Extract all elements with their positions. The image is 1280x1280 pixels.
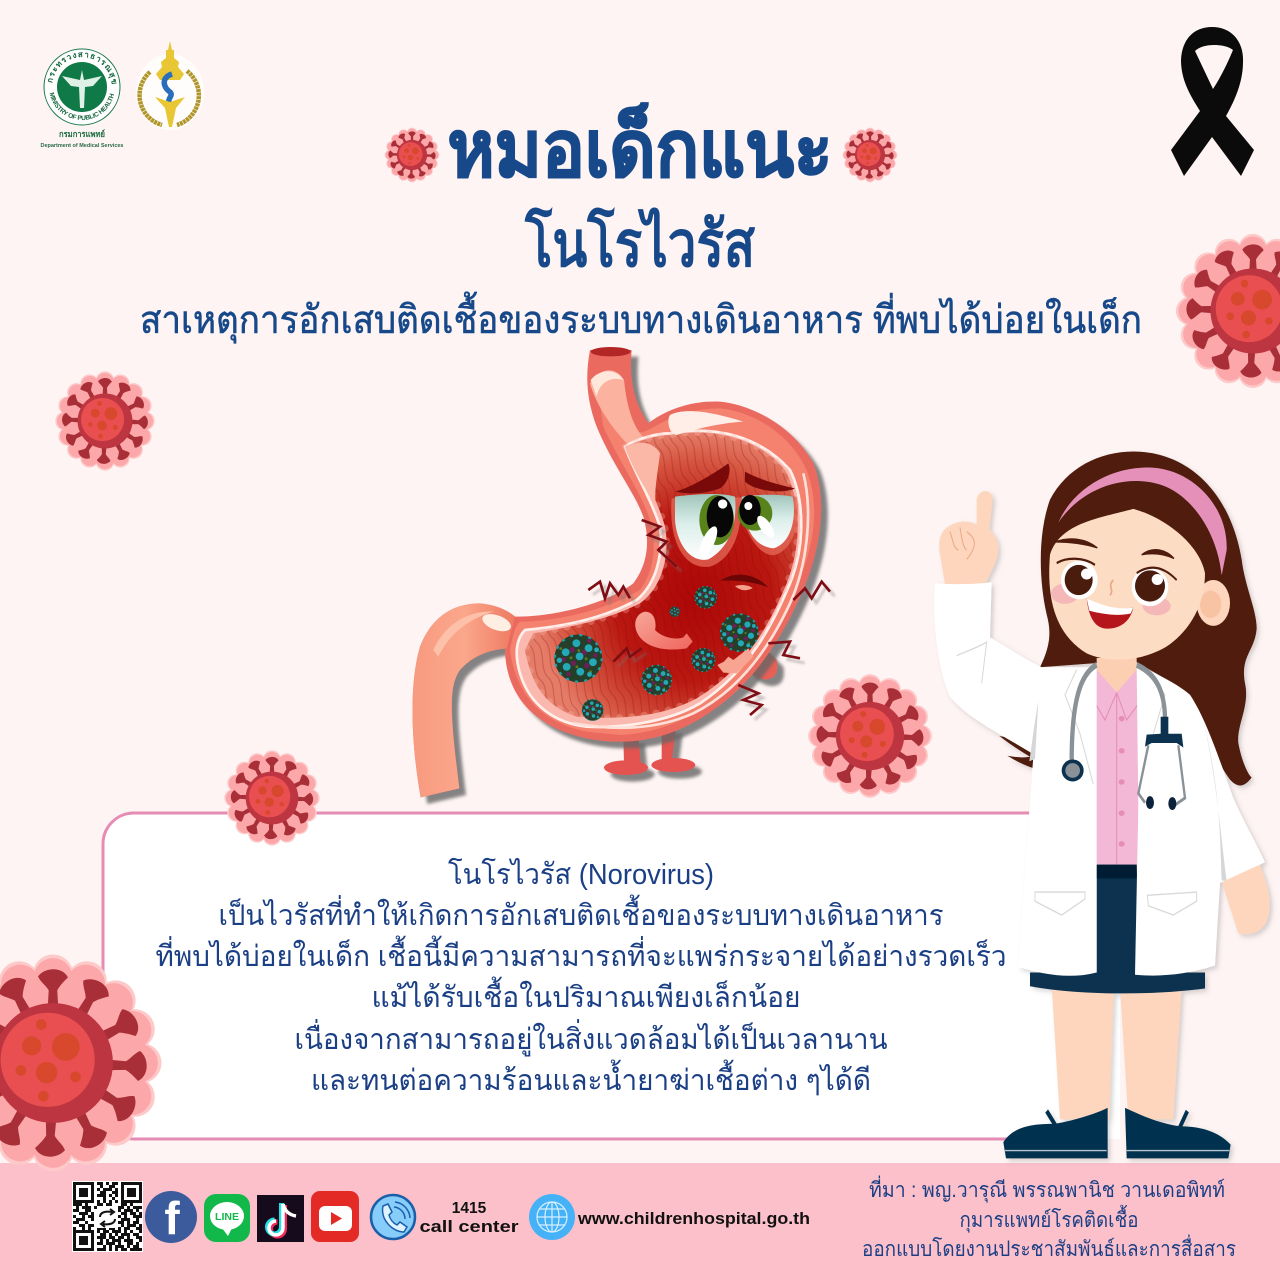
virus: near stomach right [808,674,932,798]
line 6: และทนต่อความร้อนและน้ำยาฆ่าเชื้อต่าง ๆได้ดี [311,1059,871,1097]
subtitle: description: สาเหตุการอักเสบติดเชื้อของระบบทางเดินอาหาร ที่พบได้บ่อยในเด็ก [140,291,1142,344]
call center label: call center [420,1218,519,1236]
logo: Ministry of Public Health: MINISTRY OF PUBLIC HEALTH [50,92,114,120]
stomach legs and outer arm [604,647,777,775]
illustration: doctor pointing up [934,451,1270,1158]
doctor raised hand [939,491,998,585]
icon: LINE: LINE [215,1211,239,1223]
icon: TikTok [257,1195,304,1242]
logo: Ministry of Public Health [40,48,124,149]
virus: title left [385,128,439,182]
logo: Ministry of Public Health: กรมการแพทย์ [59,129,105,139]
virus: top right large [1176,234,1280,388]
doctor hair back [999,451,1257,786]
virus: title right [843,128,897,182]
footer band [0,1163,1280,1280]
stomach face [671,463,798,590]
pain zigzags [588,520,830,715]
virus: above panel [224,750,320,846]
QR code [72,1181,143,1252]
doctor face [1049,468,1230,660]
icon: Facebook: f [164,1192,180,1244]
call center label: 1415 [452,1200,487,1217]
illustration: sad stomach with viruses [413,347,830,797]
line 1: โนโรไวรัส (Norovirus) [448,857,714,891]
website: www.childrenhospital.go.th [577,1209,810,1228]
title: หมอเด็กแนะ [448,103,832,193]
icon: YouTube [311,1191,359,1242]
icon: globe [529,1194,575,1240]
doctor shoes [1003,1108,1231,1158]
line 3: ที่พบได้บ่อยในเด็ก เชื้อนี้มีความสามารถที่จะแพร่กระจายได้อย่างรวดเร็ว [156,935,1006,973]
logo: Ministry of Public Health: Department of Medical Services [40,143,124,149]
icon: phone [371,1195,415,1239]
info panel [103,813,1120,1139]
line 4: แม้ได้รับเชื้อในปริมาณเพียงเล็กน้อย [372,976,800,1014]
call center label [420,1200,519,1236]
logo: Ministry of Public Health: กระทรวงสาธารณสุข [48,52,116,84]
line 2: เป็นไวรัสที่ทำให้เกิดการอักเสบติดเชื้อของระบบทางเดินอาหาร [218,894,944,932]
logo: Queen Sirikit children's institute [136,41,204,130]
stomach body [413,347,821,797]
black ribbon [1171,27,1254,176]
doctor legs [1052,986,1182,1119]
credit line 2: กุมารแพทย์โรคติดเชื้อ [960,1205,1138,1233]
doctor white coat [934,582,1265,976]
virus: left [55,371,155,471]
body text [156,857,1006,1097]
doctor skirt and shirt [1030,658,1205,993]
stethoscope [1062,665,1185,810]
icon: Facebook [145,1191,197,1244]
line 5: เนื่องจากสามารถอยู่ในสิ่งแวดล้อมได้เป็นเวลานาน [294,1019,888,1057]
icon: LINE [204,1194,250,1242]
subtitle: norovirus: โนโรไวรัส [524,206,755,280]
virus particles in stomach [554,586,758,721]
credit line 1: ที่มา : พญ.วารุณี พรรณพานิช วานเดอพิทท์ [869,1175,1225,1203]
source credits [862,1175,1236,1261]
stomach arms [635,612,753,673]
doctor right hand [1222,865,1270,934]
virus: bottom left large [0,954,162,1172]
credit line 3: ออกแบบโดยงานประชาสัมพันธ์และการสื่อสาร [862,1234,1236,1261]
